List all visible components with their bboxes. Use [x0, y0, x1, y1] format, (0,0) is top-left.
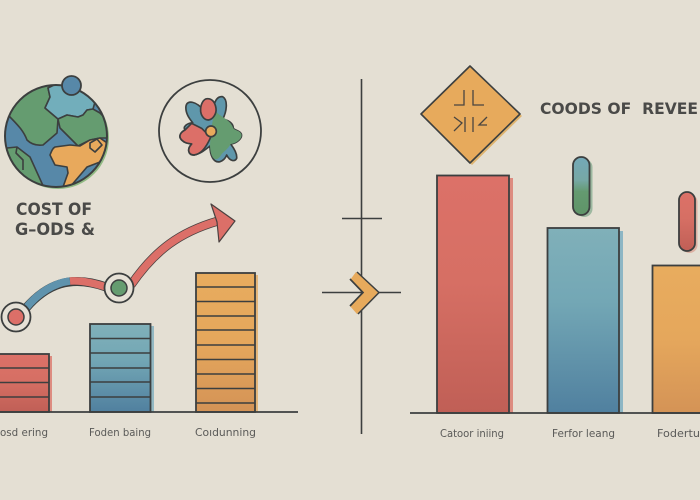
label: right bar 1: Catoor iniing: [440, 428, 504, 440]
icon: orange diamond: [421, 66, 522, 165]
axis: left chart: [0, 411, 298, 413]
label: left bar 2: Foden baing: [89, 427, 151, 439]
bar: right red: [437, 176, 513, 413]
pill: red: [679, 192, 698, 253]
axis: right chart: [410, 412, 700, 414]
label: right bar 3: Fodertu: [657, 428, 700, 440]
pill: blue green: [573, 157, 592, 217]
heading: cost of goods: COST OF: [16, 200, 92, 220]
arrow: rising trend: [2, 204, 235, 332]
label: left bar 3: Coıdunning: [195, 427, 256, 439]
marker: middle node: [104, 274, 134, 302]
heading: cost of goods: [15, 200, 95, 240]
label: right bar 2: Ferfor leang: [552, 428, 615, 440]
bar: left blue: [90, 324, 154, 412]
bar: left orange: [196, 273, 258, 412]
marker: start node: [2, 302, 30, 332]
heading: goods of revenue: COODS OF REVEE: [540, 99, 698, 118]
bar: right orange: [652, 266, 700, 413]
icon: flower in circle: [159, 80, 261, 182]
infographic canvas: [0, 65, 700, 439]
heading: cost of goods: G–ODS &: [15, 220, 95, 240]
icon: orange chevron: [350, 272, 379, 314]
icon: globe: [0, 76, 110, 190]
divider: vertical axis with cross marks: [322, 79, 401, 434]
label: left bar 1: osd ering: [0, 427, 48, 439]
bar: right blue: [548, 228, 623, 413]
bar: left red: [0, 354, 52, 412]
